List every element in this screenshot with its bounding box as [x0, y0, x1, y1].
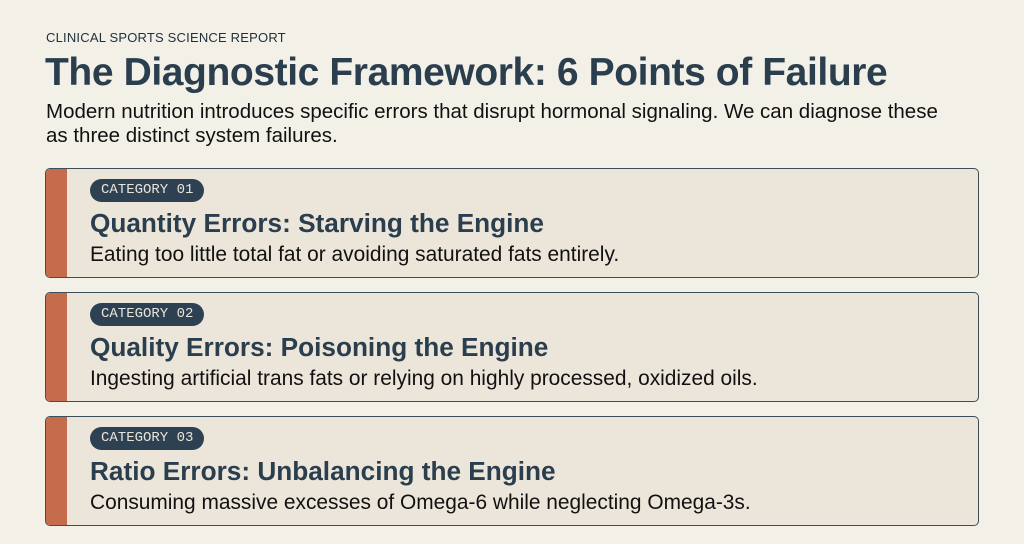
pill 02: CATEGORY 02: [101, 306, 193, 322]
body 01: Eating too little total fat or avoiding saturated fats entirely.: [90, 243, 619, 266]
panel: category 02: [45, 292, 979, 402]
pill 03: CATEGORY 03: [101, 430, 193, 446]
title: The Diagnostic Framework: 6 Points of Failure: [45, 51, 887, 94]
pill 01: CATEGORY 01: [101, 182, 193, 198]
subtitle: as three distinct system failures.: [46, 124, 338, 147]
subtitle: [46, 100, 938, 147]
kicker: CLINICAL SPORTS SCIENCE REPORT: [46, 30, 286, 45]
pill 01: [90, 179, 204, 202]
panel: category 03: [45, 416, 979, 526]
subtitle: Modern nutrition introduces specific errors that disrupt hormonal signaling. We can diagnose these: [46, 100, 938, 123]
panel: category 01: [45, 168, 979, 278]
heading 03: Ratio Errors: Unbalancing the Engine: [90, 456, 556, 486]
heading 01: Quantity Errors: Starving the Engine: [90, 208, 544, 238]
body 03: Consuming massive excesses of Omega-6 while neglecting Omega-3s.: [90, 491, 751, 514]
heading 02: Quality Errors: Poisoning the Engine: [90, 332, 548, 362]
pill 03: [90, 427, 204, 450]
pill 02: [90, 303, 204, 326]
body 02: Ingesting artificial trans fats or relying on highly processed, oxidized oils.: [90, 367, 758, 390]
